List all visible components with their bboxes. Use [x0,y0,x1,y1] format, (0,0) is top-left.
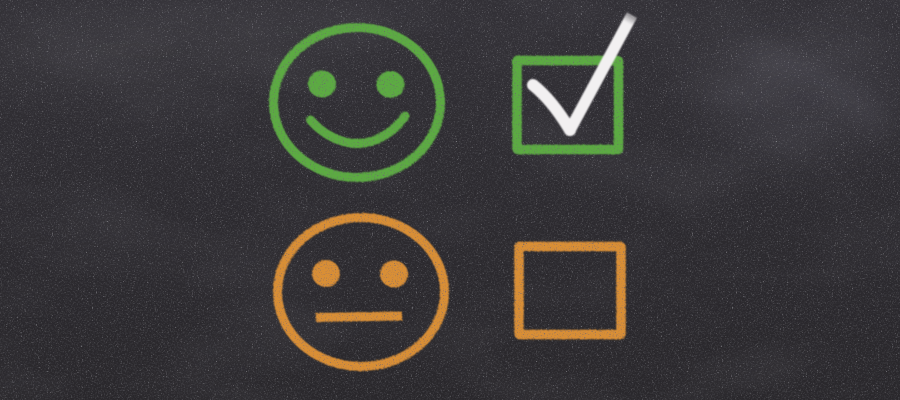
face outline [278,218,444,366]
face outline [274,28,440,178]
icon: empty orange checkbox [519,246,621,334]
smile [310,116,405,144]
icon: white check mark [533,15,632,136]
right eye [376,71,404,98]
icon: neutral face [278,218,444,366]
left eye [312,260,340,287]
icon: happy face [274,28,440,178]
right eye [380,260,408,288]
mouth [316,316,402,318]
left eye [308,70,336,98]
icon: green checkbox [517,60,618,150]
